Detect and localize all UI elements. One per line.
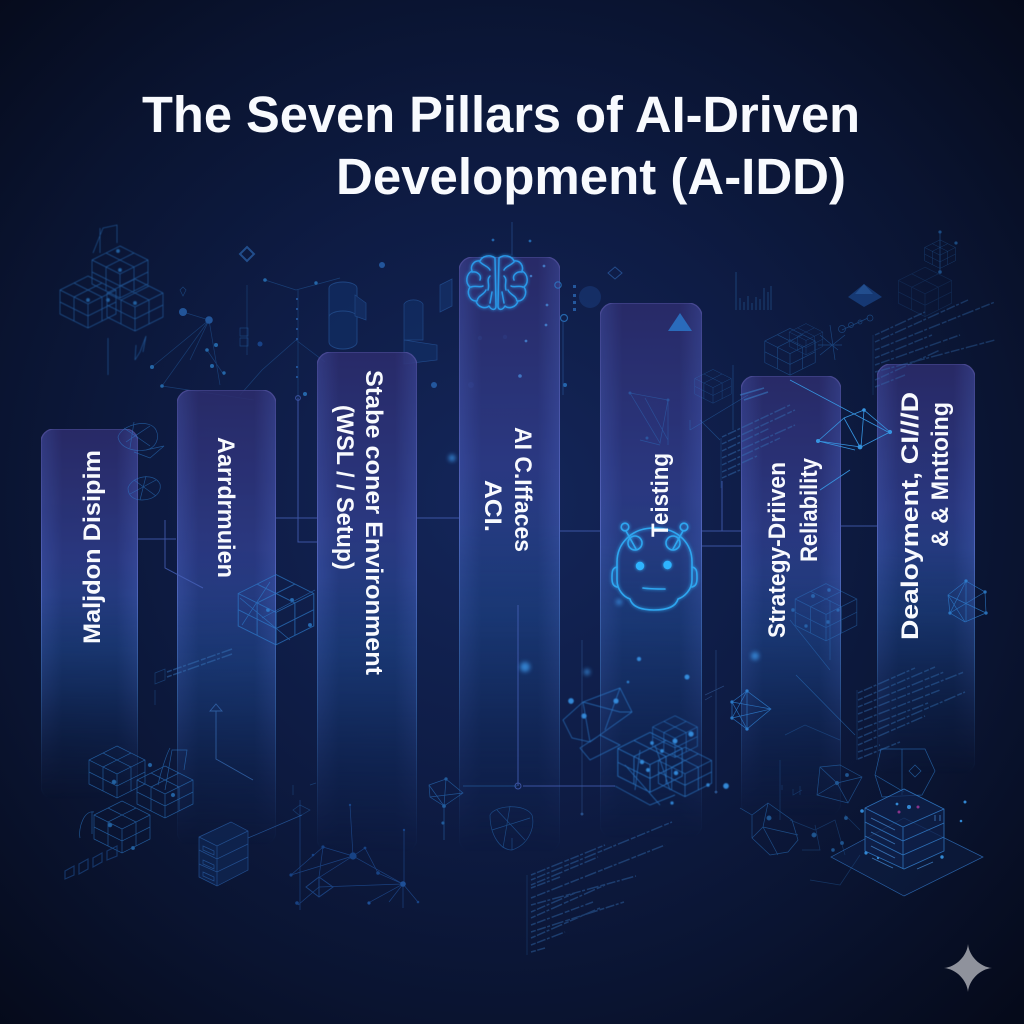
wire polygon and line pillar 4	[429, 778, 517, 840]
pillar 3 label: (WSL / / Setup)	[331, 405, 358, 570]
pillar 6 label	[764, 457, 823, 638]
wire pyramid pillar 6-7	[790, 380, 892, 490]
icon: robot head	[612, 523, 697, 610]
wire cube cluster pillar 5	[563, 657, 729, 805]
glowing dots pillars 4-6	[448, 454, 759, 675]
pillar 7: deployment	[877, 364, 975, 774]
pillar 3 label: Stabe coner Environment	[360, 370, 387, 675]
hedron pillar 6	[731, 690, 771, 730]
pillar 3 label	[331, 370, 387, 675]
pillar 7 label: Dealoyment, CI///D	[897, 392, 924, 640]
icon: brain	[467, 256, 527, 309]
pillar 5: testing	[600, 303, 702, 838]
code lines right lower	[857, 667, 965, 760]
wire star pillar 7	[948, 580, 987, 622]
pillar 6: strategy-driven reliability	[741, 376, 841, 816]
title: Development (A-IDD)	[336, 148, 846, 205]
cylinders	[329, 279, 452, 364]
pillar 2: architecture	[177, 390, 276, 845]
wire hex cube top right	[925, 231, 957, 274]
filled diamond upper right	[848, 284, 882, 307]
pillar 7 label: & & Mnttoing	[927, 402, 954, 547]
wire cubes bottom left	[80, 746, 193, 853]
pillar 7 label	[897, 392, 954, 640]
pillar 1: mastery discipline	[41, 429, 138, 799]
wireframe hexagon with diamond	[875, 749, 935, 797]
faint wire box top right	[898, 267, 952, 317]
wire brain lower pillar 4	[490, 806, 533, 850]
connectors between pillars	[138, 396, 877, 789]
placeholder squares	[65, 846, 117, 879]
wireframe cubes top left	[60, 225, 163, 375]
pillar 4: AI interfaces	[459, 257, 560, 852]
arrow up pillar 2	[210, 704, 253, 780]
pillar 3: stable environment	[317, 352, 417, 852]
pillar 1 label: Maljdon Disipim	[79, 450, 106, 644]
wire polygons bottom right	[740, 675, 862, 885]
code lines mid	[721, 405, 795, 488]
title: The Seven Pillars of AI-Driven	[142, 86, 860, 143]
pillar 2 label: Aarrdrmuien	[212, 437, 239, 578]
network bottom center-left	[289, 783, 419, 910]
vertical lines pillar gaps	[581, 640, 724, 815]
wire brains beside pillar 1	[118, 422, 164, 500]
pillar 4 label	[479, 427, 536, 552]
server stack on platform	[831, 789, 983, 896]
wire blocks upper right	[765, 315, 873, 375]
server stack	[199, 815, 302, 886]
mini bar chart	[736, 272, 771, 310]
pillar 4 label: AI C.Iffaces	[509, 427, 536, 552]
pillar 6 label: Strategy-Driiven	[764, 462, 791, 638]
faint triangle network pillar 5	[629, 392, 669, 445]
icon: triangle	[668, 313, 692, 331]
wire cube pillar 2-3	[238, 575, 315, 645]
pillar 5 label: Teisting	[647, 453, 674, 537]
pillar 4 label: ACI.	[479, 480, 506, 532]
network nodes upper left	[150, 247, 507, 400]
small nodes around pillar 4-5	[492, 222, 622, 395]
code lines upper right	[873, 300, 995, 395]
pillar 6 label: Reliability	[796, 457, 823, 562]
code lines bottom center	[527, 822, 672, 955]
wire cubes right of pillar 5	[690, 365, 768, 440]
code fragment pillar 2	[155, 649, 232, 705]
wire box pillar 6 lower	[790, 584, 857, 670]
sparkle logo	[944, 944, 992, 992]
title	[142, 86, 860, 205]
